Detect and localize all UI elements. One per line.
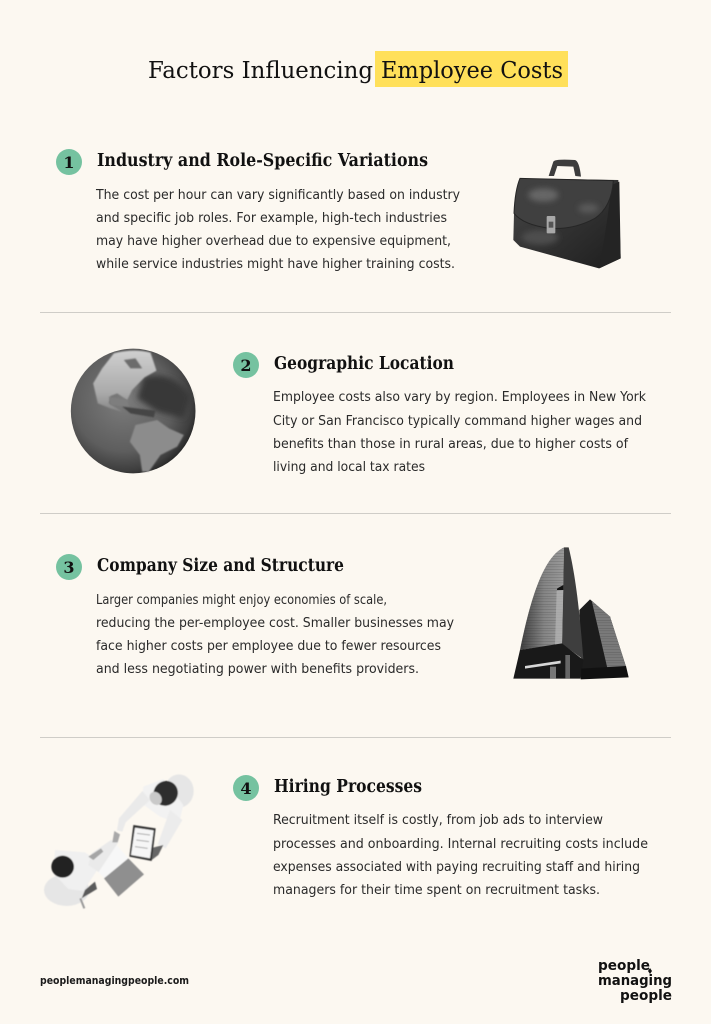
text block 4: processes and onboarding. Internal recruiting costs include: [273, 837, 648, 852]
logo: people: [598, 958, 650, 974]
footer website: peoplemanagingpeople.com: [40, 975, 189, 987]
text block 1: while service industries might have higher training costs.: [96, 257, 455, 272]
text block 4: Recruitment itself is costly, from job ads to interview: [273, 813, 603, 828]
icon: globe: [71, 349, 195, 473]
text block 1: and specific job roles. For example, high-tech industries: [96, 211, 447, 226]
panel: company size and structure: [56, 547, 629, 679]
title: [148, 51, 568, 87]
divider: [40, 737, 671, 738]
text block 3: [96, 593, 454, 677]
heading 1: Industry and Role-Specific Variations: [97, 151, 428, 171]
logo: [598, 958, 672, 1004]
text block 4: managers for their time spent on recruitment tasks.: [273, 883, 600, 898]
title: Factors Influencing: [148, 58, 373, 84]
number badge 1: 1: [63, 153, 75, 172]
title: Employee Costs: [381, 58, 563, 84]
text block 3: and less negotiating power with benefits providers.: [96, 662, 419, 677]
panel: geographic location: [71, 349, 646, 475]
number badge 2: [233, 352, 259, 378]
icon: briefcase: [513, 160, 621, 268]
text block 1: The cost per hour can vary significantly based on industry: [95, 188, 460, 203]
text block 2: Employee costs also vary by region. Employees in New York: [273, 390, 646, 405]
divider: [40, 513, 671, 514]
text block 3: Larger companies might enjoy economies of scale,: [96, 593, 387, 608]
text block 3: face higher costs per employee due to fewer resources: [96, 639, 441, 654]
text block 2: living and local tax rates: [273, 460, 425, 475]
icon: office building: [513, 547, 629, 679]
heading 3: Company Size and Structure: [97, 556, 344, 576]
logo: people: [620, 988, 672, 1004]
panel: hiring processes: [44, 774, 648, 908]
text block 2: [273, 390, 646, 475]
number badge 3: [56, 554, 82, 580]
text block 4: expenses associated with paying recruiting staff and hiring: [273, 860, 640, 875]
panel: industry and role-specific variations: [56, 149, 621, 272]
text block 2: benefits than those in rural areas, due to higher costs of: [273, 437, 628, 452]
icon: handshake from above: [44, 774, 194, 908]
heading 2: Geographic Location: [274, 354, 454, 374]
text block 1: may have higher overhead due to expensive equipment,: [96, 234, 451, 249]
text block 3: reducing the per-employee cost. Smaller businesses may: [96, 616, 454, 631]
divider: [40, 312, 671, 313]
logo: managing: [598, 973, 672, 989]
number badge 1: [56, 149, 82, 175]
number badge 4: 4: [240, 779, 252, 798]
number badge 2: 2: [240, 356, 252, 375]
text block 1: [95, 188, 460, 272]
text block 2: City or San Francisco typically command higher wages and: [273, 414, 642, 429]
number badge 3: 3: [63, 558, 75, 577]
text block 4: [273, 813, 648, 898]
number badge 4: [233, 775, 259, 801]
heading 4: Hiring Processes: [274, 777, 422, 797]
